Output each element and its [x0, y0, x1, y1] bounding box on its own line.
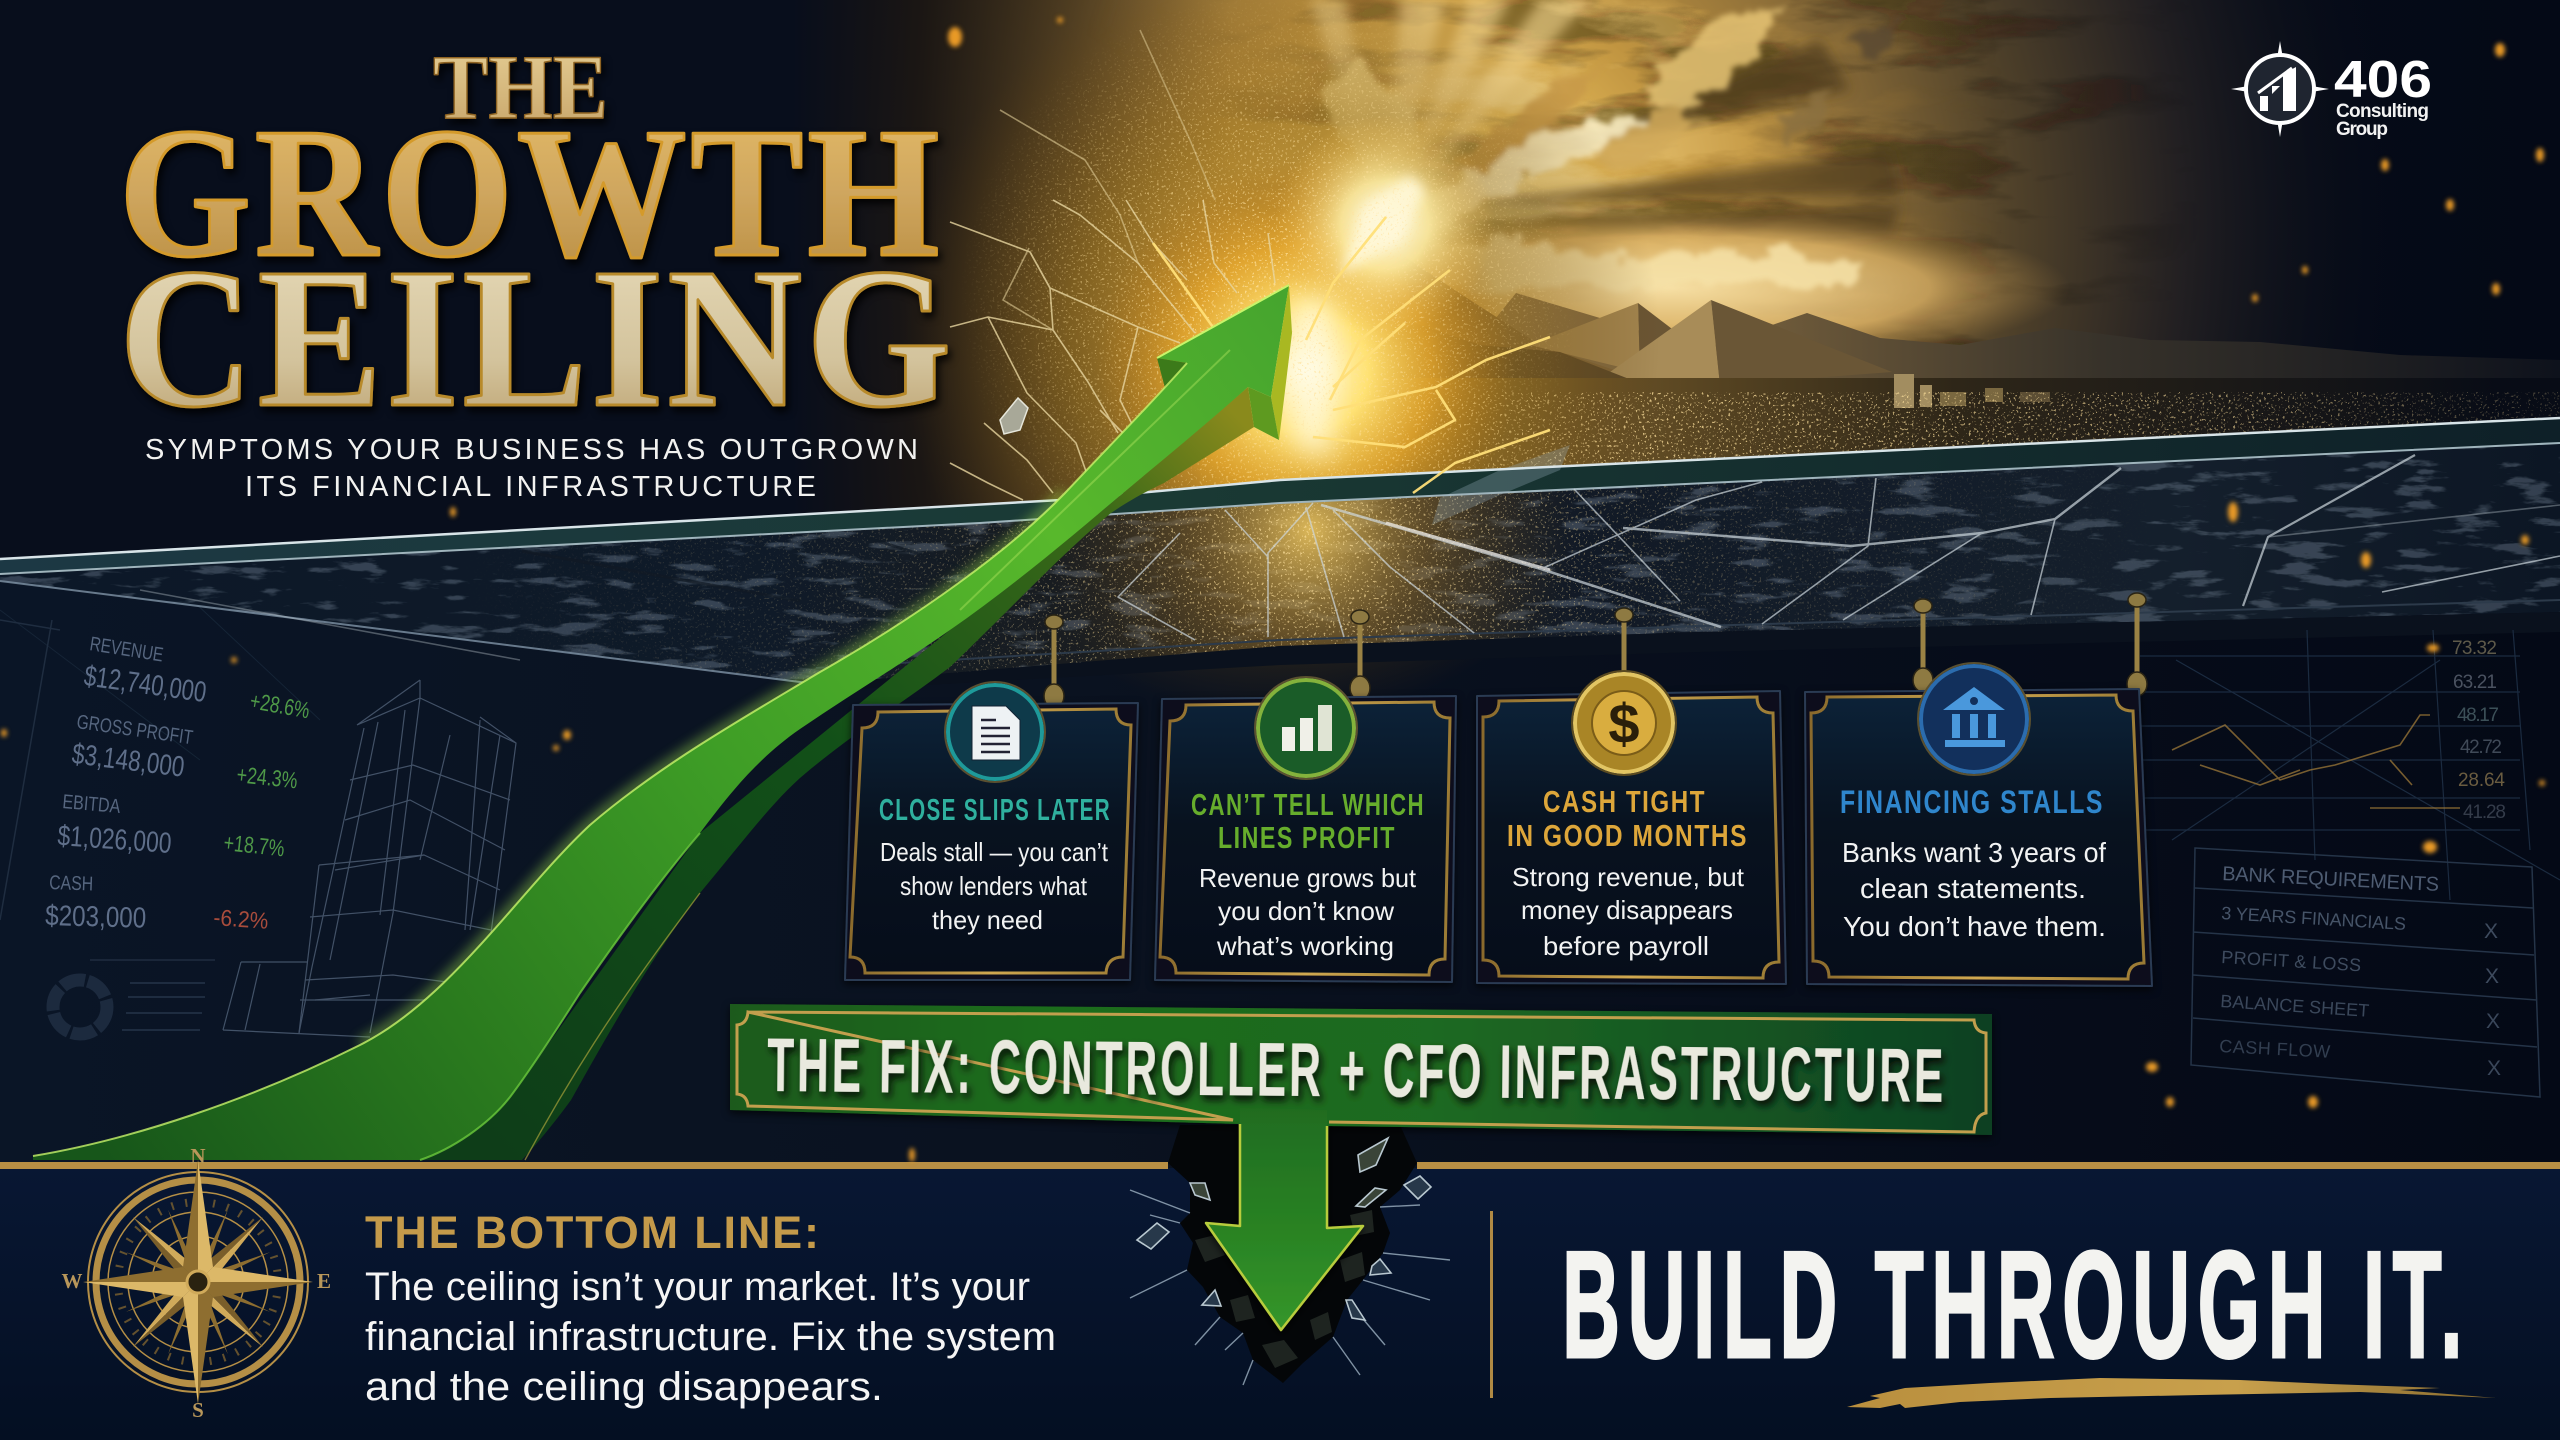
card: can't tell which lines profit: LINES PROFIT [1218, 820, 1396, 855]
financial stats panel: CASH [49, 872, 94, 896]
bank requirements table: X [2487, 1057, 2501, 1080]
ledge under glass [816, 612, 2560, 690]
logo: 406 consulting group: 406 [2334, 51, 2432, 109]
cracks in glass [140, 455, 2560, 660]
cracks bright right of impact [1153, 217, 1550, 493]
card: close slips later [845, 682, 1138, 980]
subtitle [145, 434, 918, 503]
faint grid and data top left: 33.33 [322, 52, 387, 82]
bank requirements table: PROFIT & LOSS [2221, 947, 2362, 975]
arrow glow [360, 493, 1065, 1045]
vertical divider [1490, 1211, 1493, 1398]
gold rule [0, 1162, 2560, 1169]
burst glow [900, 0, 1660, 720]
bank requirements table [2191, 848, 2540, 1097]
faint grid and data top left: 3.38 [90, 15, 141, 45]
card: close slips later: they need [932, 905, 1043, 935]
financial stats panel: REVENUE [88, 633, 165, 667]
down arrow [1206, 1108, 1363, 1330]
right chart panel: 41.28 [2463, 802, 2506, 823]
financial stats panel: $203,000 [45, 900, 147, 935]
card: can't tell which lines profit: what’s working [1216, 931, 1394, 961]
title: GROWTH [119, 90, 943, 296]
financial stats panel: +24.3% [235, 761, 299, 793]
financial stats panel: GROSS PROFIT [75, 711, 194, 749]
glass highlights [0, 418, 2560, 684]
bank requirements table: 3 YEARS FINANCIALS [2221, 903, 2407, 934]
logo: 406 consulting group: Group [2336, 119, 2388, 140]
bank requirements table: X [2486, 1010, 2500, 1033]
icon: bank [1918, 663, 2030, 775]
title: CEILING [119, 228, 955, 449]
financial stats panel: $3,148,000 [70, 738, 186, 784]
icon: dollar coin [1572, 671, 1676, 775]
card: financing stalls [1805, 663, 2152, 986]
glass edge band [0, 418, 2560, 574]
right chart panel: 28.64 [2458, 770, 2505, 791]
faint grid and data top left: 3.38 [90, 168, 141, 198]
rubble [1195, 1210, 1374, 1368]
faint grid and data top left [0, 0, 880, 760]
compass [62, 1144, 331, 1422]
financial stats panel: EBITDA [62, 791, 122, 818]
arrow side face [420, 387, 1254, 1160]
city towers [1894, 374, 2050, 408]
arrow edge [1206, 1124, 1363, 1330]
card: cash tight in good months: Strong revenue, but [1512, 862, 1745, 892]
foreground hill [1466, 342, 1626, 378]
arrowhead right face [1271, 285, 1292, 440]
card: financing stalls: clean statements. [1860, 873, 2086, 904]
right chart panel: 42.72 [2460, 737, 2502, 758]
card: cash tight in good months: money disappears [1521, 895, 1733, 925]
right chart panel: 73.32 [2452, 638, 2497, 659]
hanger rods [1044, 593, 2147, 708]
compass: N [190, 1144, 206, 1168]
card: close slips later: Deals stall — you can’t [880, 837, 1109, 867]
horizon pale gold [1504, 213, 2056, 342]
impact hole [1168, 1125, 1417, 1383]
title: THE [433, 36, 608, 138]
faint grid and data top left: 3.38 [90, 129, 141, 159]
banner plate [730, 1004, 1992, 1135]
donut chart [53, 980, 107, 1034]
broken glass shard on ceiling edge [1432, 445, 1570, 525]
main peak lit face [1240, 257, 1420, 410]
arrowhead under face [1248, 387, 1279, 440]
mini lines [122, 983, 205, 1030]
faint grid and data top left: 33.38 [204, 89, 269, 119]
card: can't tell which lines profit: CAN’T TELL WHICH [1191, 787, 1425, 822]
arrowhead barb shade [1157, 358, 1187, 388]
card: cash tight in good months: CASH TIGHT [1543, 784, 1706, 819]
financial stats panel: +28.6% [248, 687, 312, 723]
embers [1, 17, 2545, 1162]
faint grid and data top left: 39.38 [322, 129, 387, 159]
bank requirements table: X [2485, 965, 2499, 988]
compass: E [317, 1269, 331, 1293]
logo: 406 consulting group [2231, 41, 2432, 140]
logo mark [2231, 41, 2329, 137]
dark cloud rays [1470, 40, 1900, 240]
card: financing stalls: Banks want 3 years of [1842, 837, 2106, 868]
bottom line text: and the ceiling disappears. [365, 1365, 883, 1409]
card: financing stalls: You don’t have them. [1843, 911, 2106, 942]
bottom line text [365, 1207, 1056, 1409]
gold brush stroke [1847, 1378, 2496, 1408]
card: can't tell which lines profit: you don’t know [1218, 896, 1394, 926]
card: cash tight in good months [1477, 671, 1786, 984]
icon: dollar coin: $ [1608, 692, 1640, 755]
financial stats panel: -6.2% [213, 904, 269, 934]
sparks [940, 0, 1600, 640]
card: close slips later: CLOSE SLIPS LATER [879, 792, 1111, 827]
main peak shaded face [1426, 275, 1612, 371]
card: cash tight in good months: IN GOOD MONTHS [1507, 818, 1748, 853]
faint grid and data top left: 3.39 [624, 89, 675, 119]
distant mountains [1496, 293, 2560, 378]
icon: bar chart [1255, 677, 1357, 779]
bank requirements table: CASH FLOW [2219, 1036, 2331, 1062]
logo: 406 consulting group: Consulting [2336, 101, 2429, 122]
right chart panel: 48.17 [2457, 705, 2499, 726]
bottom line text: financial infrastructure. Fix the system [365, 1315, 1056, 1359]
faint grid and data top left: 3.38 [90, 89, 141, 119]
cracks golden above ceiling [950, 30, 1275, 500]
card: can't tell which lines profit [1155, 677, 1456, 982]
city light specks [1200, 392, 2560, 485]
growth arrow [33, 285, 1292, 1160]
icon: document [945, 682, 1045, 782]
bright frayed clouds [1320, 8, 1900, 290]
compass: W [62, 1269, 82, 1293]
right chart panel [2140, 630, 2560, 900]
card: financing stalls: FINANCING STALLS [1840, 784, 2104, 820]
card: cash tight in good months: before payroll [1543, 931, 1709, 961]
loose glass shard [1000, 398, 1028, 434]
arrow top face [33, 285, 1289, 1160]
glass shards [1137, 1138, 1431, 1320]
subtitle: SYMPTOMS YOUR BUSINESS HAS OUTGROWN [145, 434, 918, 466]
bottom line text: THE BOTTOM LINE: [365, 1207, 819, 1258]
right chart panel: 63.21 [2453, 672, 2497, 693]
faint grid and data top left: 7.38 [90, 52, 141, 82]
bank requirements table: BANK REQUIREMENTS [2222, 863, 2440, 896]
faint grid and data top left: 3.39 [624, 52, 675, 82]
faint grid and data top left: 39.38 [322, 89, 387, 119]
faint grid and data top left: 33.33 [204, 52, 269, 82]
cracks around hole [1130, 1190, 1450, 1385]
faint grid and data top left: 3.39 [624, 15, 675, 45]
bottom band [0, 1168, 2560, 1440]
arrow highlights [33, 285, 1289, 1160]
bank requirements table: X [2484, 920, 2498, 943]
card: can't tell which lines profit: Revenue grows but [1199, 863, 1417, 893]
bank requirements table: BALANCE SHEET [2220, 991, 2370, 1021]
title [119, 36, 955, 449]
financial stats panel: $12,740,000 [82, 660, 208, 709]
city plain [1416, 378, 2537, 472]
sky with sunburst and clouds [0, 0, 2560, 600]
fix banner [730, 1004, 1992, 1330]
banner border [737, 1012, 1986, 1132]
card: close slips later: show lenders what [900, 871, 1088, 901]
light rays to top [1308, 0, 1589, 162]
second peak [1530, 303, 1640, 372]
financial stats panel: $1,026,000 [57, 820, 172, 860]
subtitle: ITS FINANCIAL INFRASTRUCTURE [245, 471, 816, 503]
compass: S [192, 1398, 204, 1422]
faint grid and data top left: 33.33 [322, 15, 387, 45]
financial stats panel: +18.7% [222, 829, 286, 861]
faint grid and data top left: 33.33 [204, 15, 269, 45]
building wireframe [223, 680, 516, 1037]
bottom line text: The ceiling isn’t your market. It’s your [365, 1265, 1030, 1309]
glass ceiling underside [0, 440, 2560, 700]
financial stats panel [0, 620, 312, 1034]
third peak [1610, 300, 1720, 385]
